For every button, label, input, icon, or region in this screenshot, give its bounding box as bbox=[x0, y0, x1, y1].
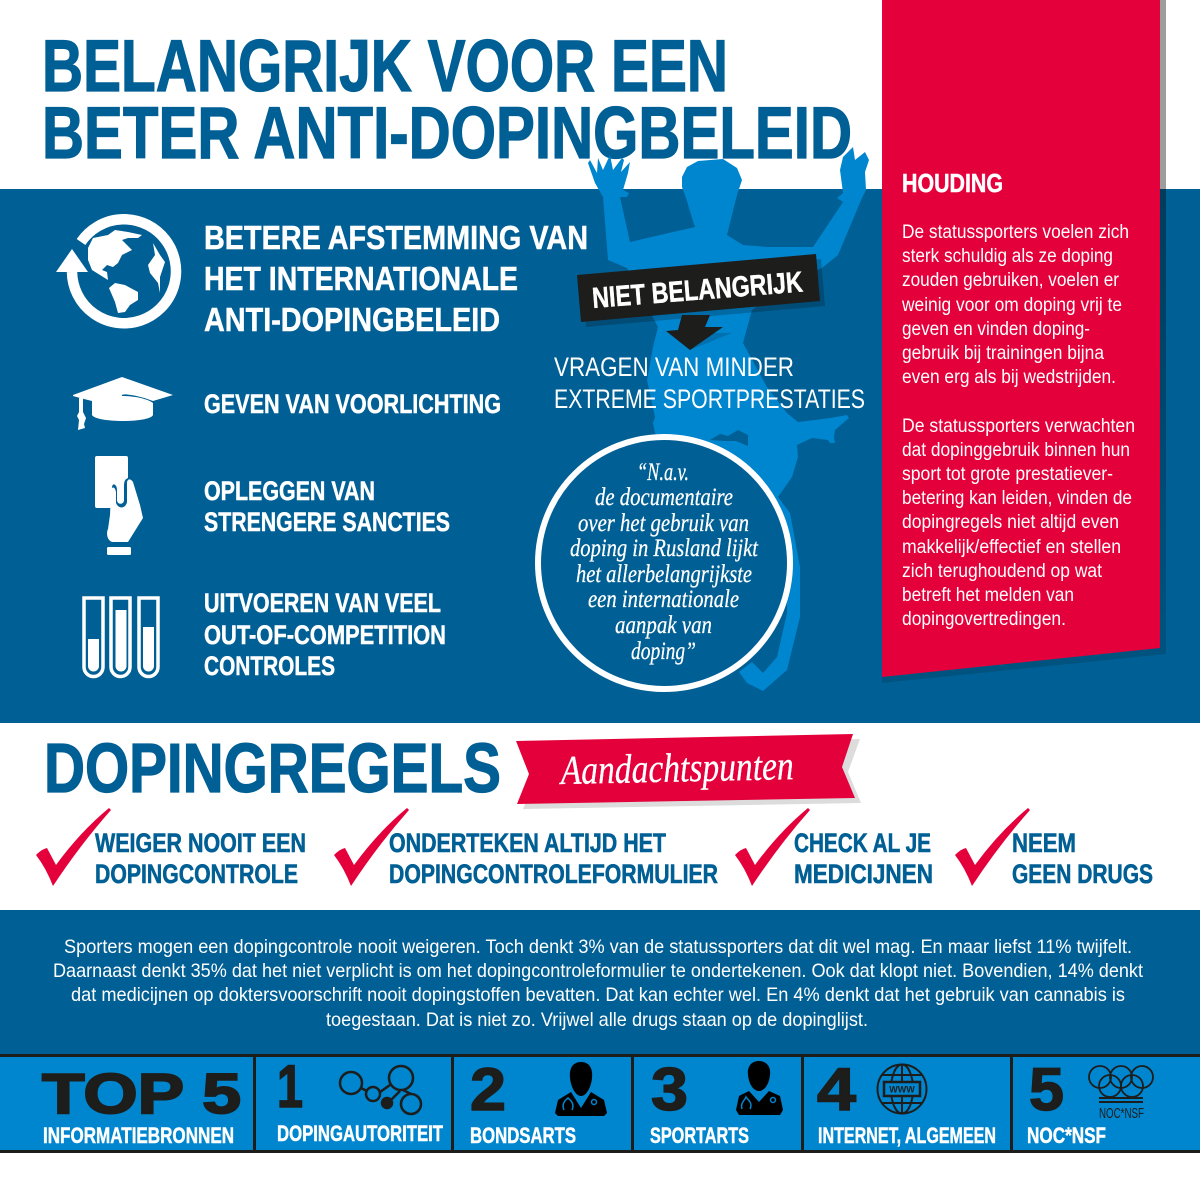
source 2: bondsarts: BONDSARTS bbox=[470, 1123, 576, 1148]
icon: www globe bbox=[878, 1064, 926, 1114]
left column: priorities bbox=[56, 219, 588, 681]
label: sancties bbox=[204, 476, 450, 537]
body text: houding: makkelijk/effectief en stellen bbox=[902, 537, 1121, 558]
source 3: sportarts: 3 bbox=[651, 1056, 688, 1123]
quote circle: aanpak van bbox=[615, 610, 712, 639]
title: BELANGRIJK VOOR EEN bbox=[42, 26, 728, 107]
label: sancties: STRENGERE SANCTIES bbox=[204, 507, 450, 537]
body text: houding bbox=[901, 222, 1135, 630]
quote circle bbox=[538, 437, 790, 689]
body text: houding: betreft het melden van bbox=[902, 585, 1074, 606]
body text: houding: betering kan leiden, vinden de bbox=[902, 488, 1132, 509]
rule 4 bbox=[1012, 828, 1153, 889]
heading: afstemming bbox=[204, 219, 588, 338]
rule 3 bbox=[794, 828, 933, 889]
icon: graduation cap bbox=[73, 377, 173, 430]
body text: houding: sterk schuldig als ze doping bbox=[902, 246, 1113, 267]
ribbon: aandachtspunten: Aandachtspunten bbox=[558, 742, 794, 793]
panel: explanation text: Sporters mogen een dopingcontrole nooit weigeren. Toch denkt 3% van de statussporters dat dit wel mag. En maar liefst 11% twijfelt. bbox=[64, 936, 1132, 958]
source 3: sportarts bbox=[650, 1056, 783, 1148]
source 4: internet: 4 bbox=[817, 1056, 857, 1123]
check 4 bbox=[955, 808, 1030, 886]
source 1: dopingautoriteit: DOPINGAUTORITEIT bbox=[277, 1121, 443, 1146]
check 1 bbox=[36, 808, 111, 886]
top 5 heading: INFORMATIEBRONNEN bbox=[43, 1123, 234, 1148]
body text: houding: geven en vinden doping- bbox=[902, 319, 1090, 340]
body text: houding: dopingovertredingen. bbox=[902, 609, 1066, 630]
icon: www globe: WWW bbox=[889, 1084, 915, 1094]
panel: explanation text bbox=[0, 910, 1200, 1055]
quote circle: de documentaire bbox=[595, 482, 733, 511]
rule 1 bbox=[95, 828, 306, 889]
top 5 heading: TOP 5 bbox=[42, 1062, 241, 1126]
top 5 heading bbox=[42, 1062, 241, 1148]
source 2: bondsarts bbox=[470, 1056, 607, 1148]
panel: explanation text: toegestaan. Dat is niet zo. Vrijwel alle drugs staan op de dopinglijst. bbox=[326, 1009, 868, 1031]
panel: explanation text: Daarnaast denkt 35% dat het niet verplicht is om het dopingcontroleformulier te ondertekenen. Ook dat klopt niet. Bovendien, 14% denkt bbox=[53, 960, 1144, 982]
quote circle: “N.a.v. bbox=[637, 457, 689, 486]
label: voorlichting: GEVEN VAN VOORLICHTING bbox=[204, 389, 501, 419]
text: vragen van minder extreme sportprestaties: VRAGEN VAN MINDER bbox=[554, 352, 794, 382]
body text: houding: gebruik bij trainingen bijna bbox=[902, 343, 1104, 364]
label: sancties: OPLEGGEN VAN bbox=[204, 476, 375, 506]
quote circle: een internationale bbox=[588, 584, 739, 613]
heading: afstemming: ANTI-DOPINGBELEID bbox=[204, 301, 500, 338]
quote circle: doping” bbox=[631, 636, 696, 665]
label: controles bbox=[204, 588, 446, 681]
source 4: internet bbox=[817, 1056, 996, 1148]
source 2: bondsarts: 2 bbox=[470, 1056, 506, 1123]
body text: houding: zich terughoudend op wat bbox=[902, 561, 1103, 582]
check 3 bbox=[735, 808, 810, 886]
panel: houding bbox=[882, 0, 1166, 683]
source 1: dopingautoriteit bbox=[277, 1053, 443, 1146]
source 5: noc*nsf: NOC*NSF bbox=[1027, 1123, 1106, 1148]
title: BETER ANTI-DOPINGBELEID bbox=[42, 93, 852, 174]
rule 2 bbox=[389, 828, 718, 889]
label: controles: UITVOEREN VAN VEEL bbox=[204, 588, 441, 618]
text: vragen van minder extreme sportprestaties: EXTREME SPORTPRESTATIES bbox=[554, 384, 865, 414]
icon: hand with card bbox=[95, 456, 143, 555]
icon: network bbox=[340, 1066, 421, 1114]
body text: houding: even erg als bij wedstrijden. bbox=[902, 367, 1116, 388]
rule 3: CHECK AL JE bbox=[794, 828, 931, 858]
heading: afstemming: BETERE AFSTEMMING VAN bbox=[204, 219, 588, 256]
body text: houding: zouden gebruiken, voelen er bbox=[902, 270, 1120, 291]
rule 1: DOPINGCONTROLE bbox=[95, 859, 298, 889]
quote circle: over het gebruik van bbox=[578, 508, 749, 537]
body text: houding: De statussporters voelen zich bbox=[902, 222, 1129, 243]
icon: test tubes bbox=[84, 598, 158, 676]
quote circle: het allerbelangrijkste bbox=[576, 559, 752, 588]
quote circle: doping in Rusland lijkt bbox=[570, 533, 759, 562]
icon: olympic rings: NOC*NSF bbox=[1099, 1105, 1144, 1122]
body text: houding: De statussporters verwachten bbox=[902, 416, 1135, 437]
source 4: internet: INTERNET, ALGEMEEN bbox=[818, 1123, 996, 1148]
body text: houding: dat dopinggebruik binnen hun bbox=[902, 440, 1130, 461]
source 5: noc*nsf: 5 bbox=[1029, 1056, 1064, 1123]
niet belangrijk label with arrow: NIET BELANGRIJK bbox=[591, 267, 804, 315]
rule 1: WEIGER NOOIT EEN bbox=[95, 828, 306, 858]
heading: houding: HOUDING bbox=[902, 168, 1003, 198]
icon: doctor bbox=[736, 1061, 783, 1115]
title bbox=[42, 26, 852, 174]
source 1: dopingautoriteit: 1 bbox=[277, 1053, 303, 1120]
icon: rotating globe bbox=[56, 219, 176, 323]
heading: dopingregels: DOPINGREGELS bbox=[44, 729, 501, 807]
icon: doctor bbox=[555, 1062, 607, 1116]
source 5: noc*nsf bbox=[1027, 1056, 1153, 1148]
rule 4: GEEN DRUGS bbox=[1012, 859, 1153, 889]
panel: explanation text: dat medicijnen op doktersvoorschrift nooit dopingstoffen bevatten. Dat kan echter wel. En 4% denkt dat het gebruik van cannabis is bbox=[71, 984, 1125, 1006]
rule 2: ONDERTEKEN ALTIJD HET bbox=[389, 828, 666, 858]
body text: houding: sport tot grote prestatiever- bbox=[902, 464, 1113, 485]
check 2 bbox=[334, 808, 409, 886]
main blue band bbox=[0, 189, 1200, 723]
cyclist silhouette bbox=[588, 147, 869, 691]
label: controles: OUT-OF-COMPETITION bbox=[204, 620, 446, 650]
ribbon: aandachtspunten bbox=[516, 734, 861, 809]
rule 2: DOPINGCONTROLEFORMULIER bbox=[389, 859, 718, 889]
text: vragen van minder extreme sportprestaties bbox=[554, 352, 865, 414]
checklist bbox=[36, 808, 1153, 889]
heading: afstemming: HET INTERNATIONALE bbox=[204, 260, 518, 297]
source 3: sportarts: SPORTARTS bbox=[650, 1123, 749, 1148]
body text: houding: dopingregels niet altijd even bbox=[902, 512, 1119, 533]
rule 4: NEEM bbox=[1012, 828, 1076, 858]
label: controles: CONTROLES bbox=[204, 651, 335, 681]
body text: houding: weinig voor om doping vrij te bbox=[901, 295, 1122, 316]
niet belangrijk label with arrow bbox=[577, 254, 825, 350]
rule 3: MEDICIJNEN bbox=[794, 859, 933, 889]
panel: top 5 information sources bbox=[0, 1053, 1200, 1153]
